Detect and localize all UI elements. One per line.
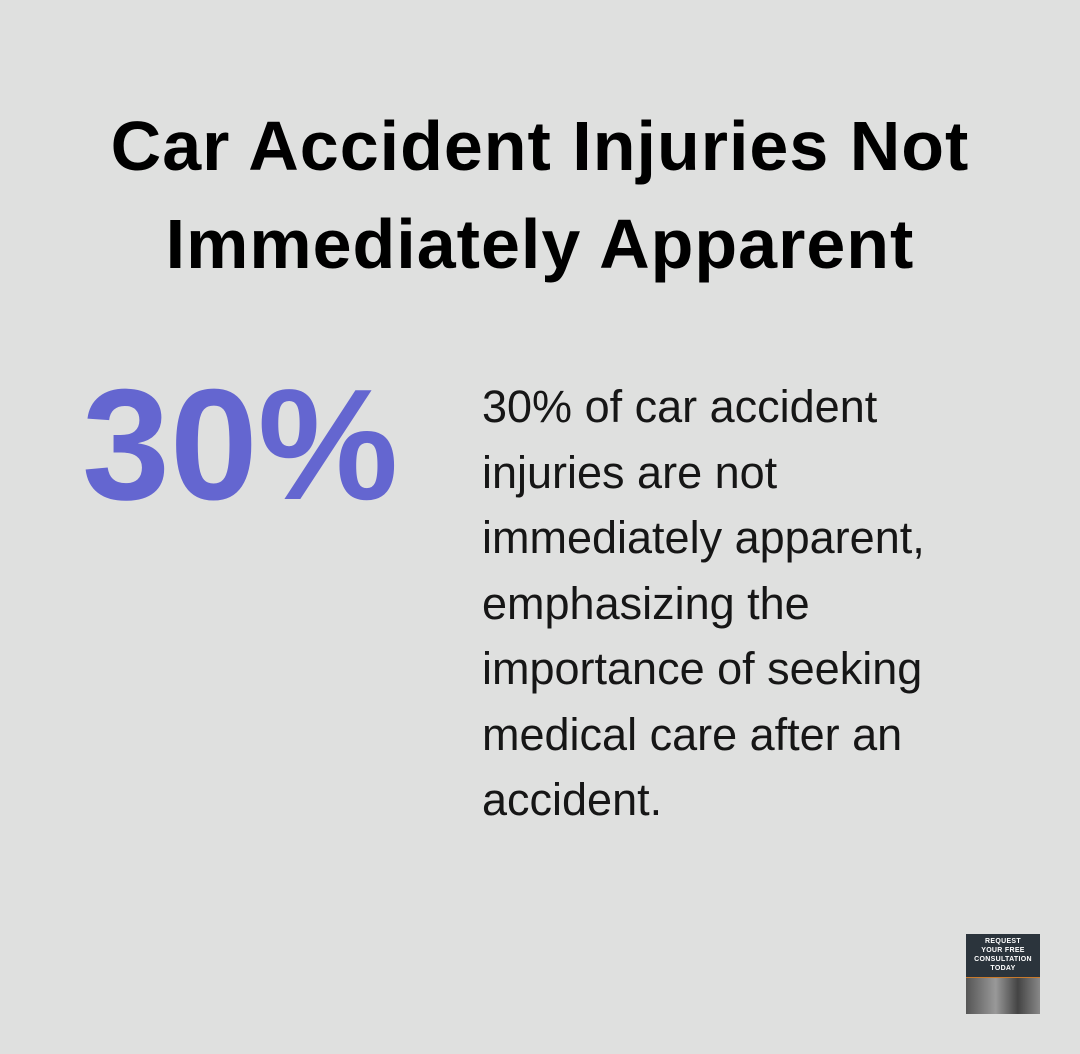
description text: 30% of car accident — [482, 381, 877, 432]
badge: consultation — [966, 934, 1040, 1013]
description text: importance of seeking — [482, 643, 922, 694]
big stat: 30% — [82, 357, 398, 533]
title: Immediately Apparent — [166, 205, 914, 283]
badge: consultation: YOUR FREE — [981, 947, 1025, 954]
title: Car Accident Injuries Not — [111, 107, 969, 185]
description text: immediately apparent, — [482, 512, 925, 563]
description text: emphasizing the — [482, 578, 810, 628]
description text: accident. — [482, 774, 662, 825]
description text: medical care after an — [482, 708, 902, 760]
title — [111, 107, 969, 283]
badge: consultation: TODAY — [990, 965, 1016, 972]
description text: injuries are not — [482, 446, 777, 498]
description text — [482, 381, 925, 825]
badge: consultation: REQUEST — [985, 938, 1021, 945]
badge: consultation: CONSULTATION — [974, 956, 1032, 963]
